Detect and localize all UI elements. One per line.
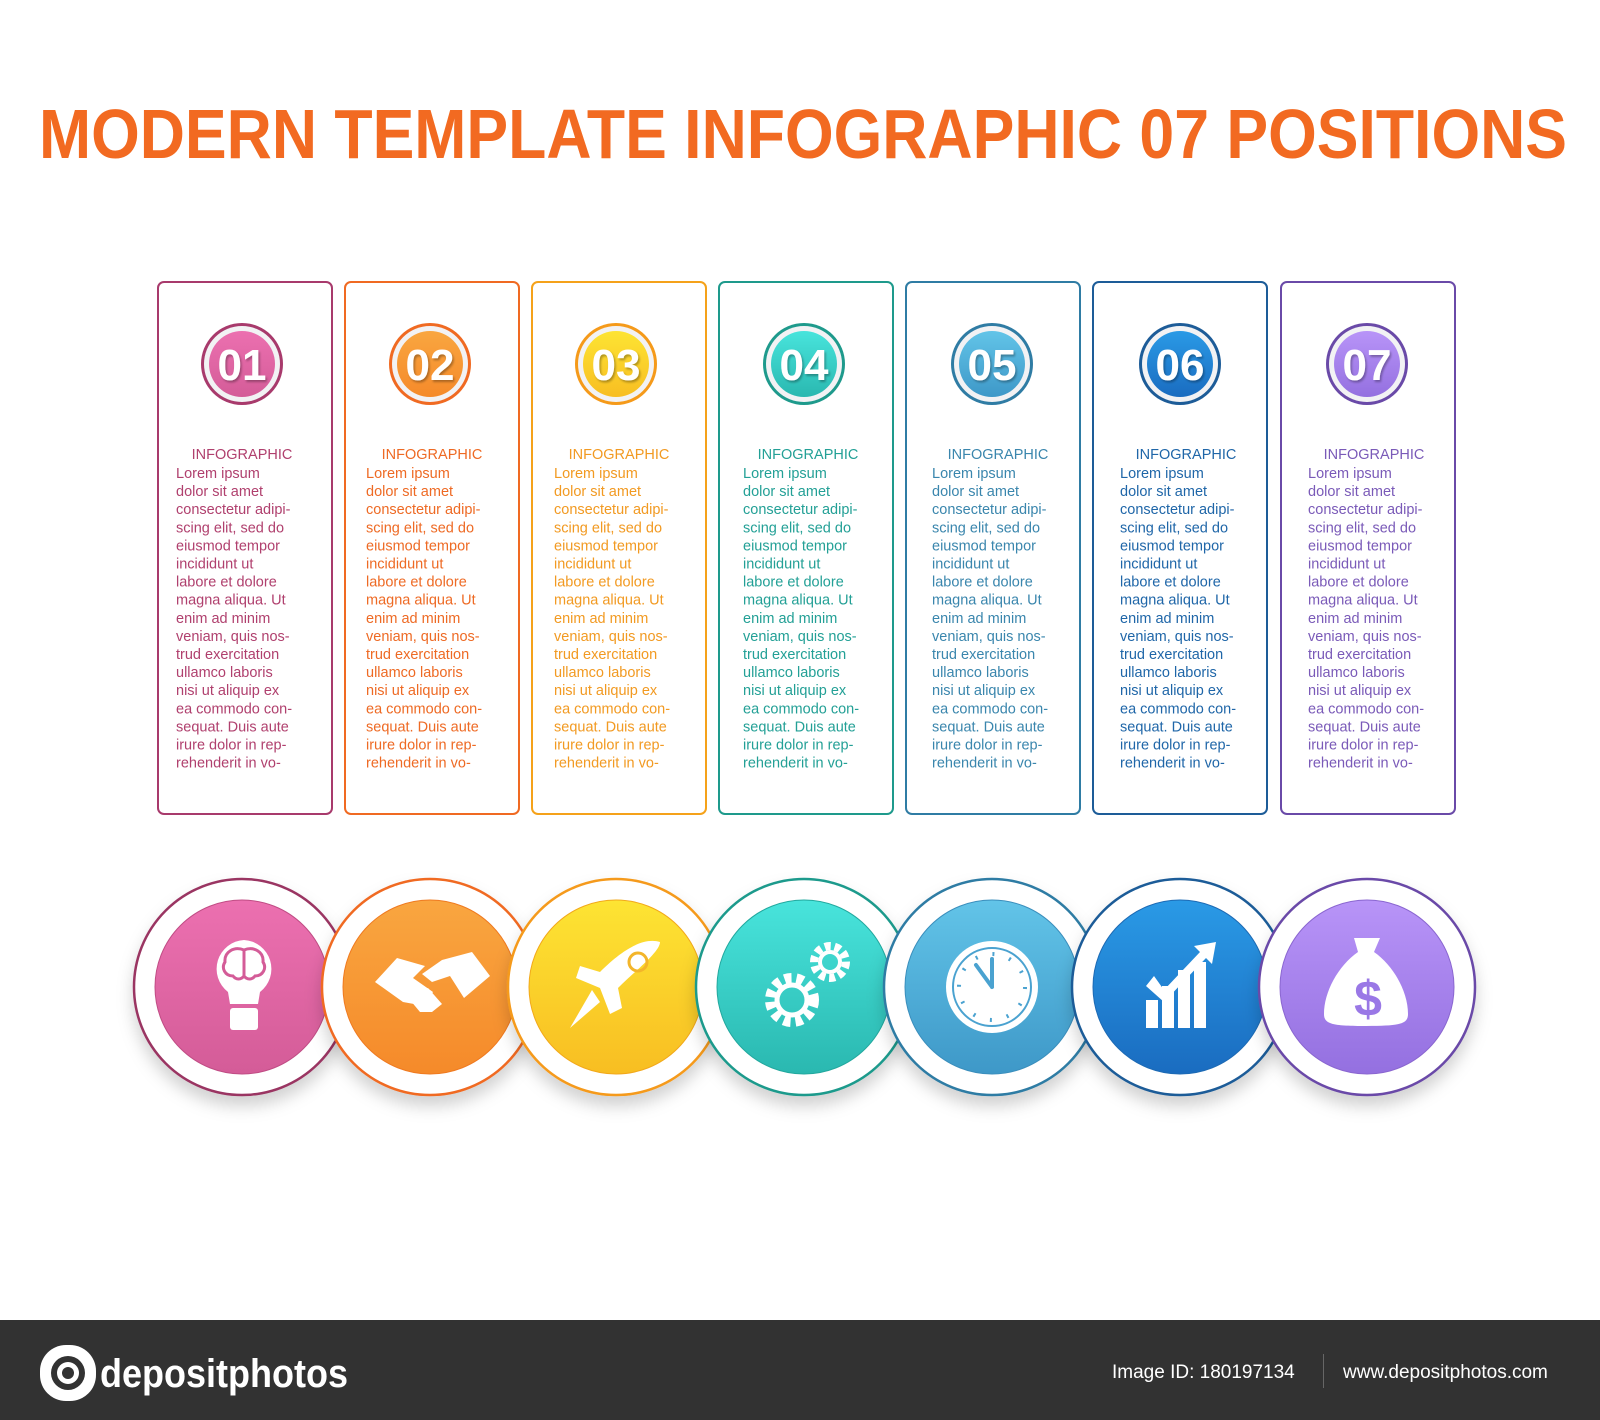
text: 03: labore et dolore [554,575,655,591]
text: 03: magna aliqua. Ut [554,593,664,609]
text: 01: nisi ut aliquip ex [176,683,280,699]
text: 03: sequat. Duis aute [554,719,667,735]
badge: 04: 04 [780,341,829,390]
text: 02: incididunt ut [366,556,443,572]
text: 02: rehenderit in vo- [366,756,471,772]
text: 07: dolor sit amet [1308,484,1395,500]
text: 05: INFOGRAPHIC [948,447,1048,463]
text: 04: ea commodo con- [743,701,859,717]
text: 07: consectetur adipi- [1308,502,1423,518]
icon: money bag: $ [1354,971,1382,1027]
text: 06: veniam, quis nos- [1120,629,1234,645]
text: 05: incididunt ut [932,556,1009,572]
text: 02: trud exercitation [366,647,469,663]
text: 04: consectetur adipi- [743,502,858,518]
text: 07: Lorem ipsum [1308,466,1392,482]
panel: 06 [1093,282,1267,814]
text: 02: consectetur adipi- [366,502,481,518]
text: 01: enim ad minim [176,611,270,627]
text: 04: nisi ut aliquip ex [743,683,847,699]
text: 01: rehenderit in vo- [176,756,281,772]
text: 05: scing elit, sed do [932,520,1040,536]
badge: 04 [763,323,845,405]
text: 02: irure dolor in rep- [366,738,477,754]
panel: 02 [345,282,519,814]
text: 06: INFOGRAPHIC [1136,447,1236,463]
text: 07: rehenderit in vo- [1308,756,1413,772]
text: 07: enim ad minim [1308,611,1402,627]
text: 04: INFOGRAPHIC [758,447,858,463]
text: 05: eiusmod tempor [932,538,1036,554]
circle: 01 lightbulb [134,879,350,1095]
text: 02: enim ad minim [366,611,460,627]
text: 02: veniam, quis nos- [366,629,480,645]
text: 05: nisi ut aliquip ex [932,683,1036,699]
text: 01: INFOGRAPHIC [192,447,292,463]
badge: 07: 07 [1343,341,1391,390]
text: 07: magna aliqua. Ut [1308,593,1418,609]
text: 05: enim ad minim [932,611,1026,627]
text: 03: nisi ut aliquip ex [554,683,658,699]
circle: 05 clock [884,879,1100,1095]
text: 05: labore et dolore [932,575,1033,591]
text: 02: sequat. Duis aute [366,719,479,735]
text: 04: irure dolor in rep- [743,738,854,754]
badge: 07 [1326,323,1408,405]
text: 06: ullamco laboris [1120,665,1217,681]
text: 07: ea commodo con- [1308,701,1424,717]
text: 06: irure dolor in rep- [1120,738,1231,754]
text: 02: INFOGRAPHIC [382,447,482,463]
text: 04: scing elit, sed do [743,520,851,536]
text: 04: trud exercitation [743,647,846,663]
text: 04: magna aliqua. Ut [743,593,853,609]
text: 05: ullamco laboris [932,665,1029,681]
text: 05: magna aliqua. Ut [932,593,1042,609]
text: 05: ea commodo con- [932,701,1048,717]
website: www.depositphotos.com [1342,1362,1548,1383]
circle: 02 handshake [322,879,538,1095]
footer bar [0,1320,1600,1420]
text: 01: dolor sit amet [176,484,263,500]
text: 04: labore et dolore [743,575,844,591]
panel: 04 [719,282,893,814]
text: 04: veniam, quis nos- [743,629,857,645]
badge: 05 [951,323,1033,405]
text: 04: sequat. Duis aute [743,719,856,735]
text: 06: magna aliqua. Ut [1120,593,1230,609]
badge: 03 [575,323,657,405]
text: 04: eiusmod tempor [743,538,847,554]
text: 04: rehenderit in vo- [743,756,848,772]
badge: 05: 05 [968,341,1016,390]
text: 06: dolor sit amet [1120,484,1207,500]
text: 03: irure dolor in rep- [554,738,665,754]
badge: 02 [389,323,471,405]
text: 06: consectetur adipi- [1120,502,1235,518]
text: 01: veniam, quis nos- [176,629,290,645]
circle: 04 gears [696,879,912,1095]
text: 01: scing elit, sed do [176,520,284,536]
panel: 05 [906,282,1080,814]
text: 07: trud exercitation [1308,647,1411,663]
text: 06: enim ad minim [1120,611,1214,627]
text: 07: ullamco laboris [1308,665,1405,681]
text: 01: Lorem ipsum [176,466,260,482]
text: 06: rehenderit in vo- [1120,756,1225,772]
text: 07: labore et dolore [1308,575,1409,591]
text: 07: nisi ut aliquip ex [1308,683,1412,699]
text: 06: scing elit, sed do [1120,520,1228,536]
text: 03: eiusmod tempor [554,538,658,554]
text: 03: ullamco laboris [554,665,651,681]
text: 03: ea commodo con- [554,701,670,717]
text: 06: incididunt ut [1120,556,1197,572]
text: 05: Lorem ipsum [932,466,1016,482]
text: 07: incididunt ut [1308,556,1385,572]
text: 04: dolor sit amet [743,484,830,500]
text: 05: dolor sit amet [932,484,1019,500]
text: 03: INFOGRAPHIC [569,447,669,463]
text: 02: ullamco laboris [366,665,463,681]
text: 03: trud exercitation [554,647,657,663]
text: 02: magna aliqua. Ut [366,593,476,609]
icon: money bag [1324,938,1408,1027]
text: 03: rehenderit in vo- [554,756,659,772]
icon: clock [946,941,1038,1033]
text: 01: magna aliqua. Ut [176,593,286,609]
text: 03: dolor sit amet [554,484,641,500]
text: 03: scing elit, sed do [554,520,662,536]
text: 06: Lorem ipsum [1120,466,1204,482]
text: 05: trud exercitation [932,647,1035,663]
text: 03: veniam, quis nos- [554,629,668,645]
image id: Image ID: 180197134 [1112,1362,1295,1383]
icon: gears [770,946,846,1022]
badge: 01: 01 [218,341,266,390]
text: 02: ea commodo con- [366,701,482,717]
text: 01: incididunt ut [176,556,253,572]
badge: 02: 02 [406,341,454,390]
circle: 07 money bag [1259,879,1475,1095]
text: 04: enim ad minim [743,611,837,627]
panel: 01 [158,282,332,814]
text: 05: irure dolor in rep- [932,738,1043,754]
text: 05: rehenderit in vo- [932,756,1037,772]
text: 01: ea commodo con- [176,701,292,717]
logo: depositphotos: depositphotos [100,1352,348,1396]
icon: handshake [375,952,490,1012]
text: 07: sequat. Duis aute [1308,719,1421,735]
text: 02: scing elit, sed do [366,520,474,536]
text: 03: Lorem ipsum [554,466,638,482]
text: 03: consectetur adipi- [554,502,669,518]
text: 03: enim ad minim [554,611,648,627]
text: 07: INFOGRAPHIC [1324,447,1424,463]
text: 06: nisi ut aliquip ex [1120,683,1224,699]
text: 03: incididunt ut [554,556,631,572]
text: 05: sequat. Duis aute [932,719,1045,735]
text: 05: consectetur adipi- [932,502,1047,518]
text: 02: Lorem ipsum [366,466,450,482]
text: 02: labore et dolore [366,575,467,591]
text: 06: labore et dolore [1120,575,1221,591]
icon: rocket [570,941,660,1028]
text: 07: eiusmod tempor [1308,538,1412,554]
text: 01: labore et dolore [176,575,277,591]
text: 01: ullamco laboris [176,665,273,681]
text: 02: dolor sit amet [366,484,453,500]
text: 06: sequat. Duis aute [1120,719,1233,735]
panel: 03 [532,282,706,814]
text: 07: irure dolor in rep- [1308,738,1419,754]
circle: 03 rocket [508,879,724,1095]
text: 02: nisi ut aliquip ex [366,683,470,699]
badge: 03: 03 [592,341,640,390]
text: 06: ea commodo con- [1120,701,1236,717]
text: 06: trud exercitation [1120,647,1223,663]
badge: 01 [201,323,283,405]
text: 01: sequat. Duis aute [176,719,289,735]
text: 04: incididunt ut [743,556,820,572]
text: 06: eiusmod tempor [1120,538,1224,554]
circle: 06 chart [1072,879,1288,1095]
icon: growth chart [1146,942,1216,1028]
text: 01: irure dolor in rep- [176,738,287,754]
text: 02: eiusmod tempor [366,538,470,554]
text: 04: Lorem ipsum [743,466,827,482]
text: 07: scing elit, sed do [1308,520,1416,536]
badge: 06: 06 [1156,341,1204,390]
text: 07: veniam, quis nos- [1308,629,1422,645]
text: 01: eiusmod tempor [176,538,280,554]
panel: 07 [1281,282,1455,814]
text: 01: trud exercitation [176,647,279,663]
text: 05: veniam, quis nos- [932,629,1046,645]
badge: 06 [1139,323,1221,405]
icon: lightbulb with brain [217,940,271,1030]
logo: depositphotos [40,1345,348,1401]
text: 04: ullamco laboris [743,665,840,681]
text: 01: consectetur adipi- [176,502,291,518]
